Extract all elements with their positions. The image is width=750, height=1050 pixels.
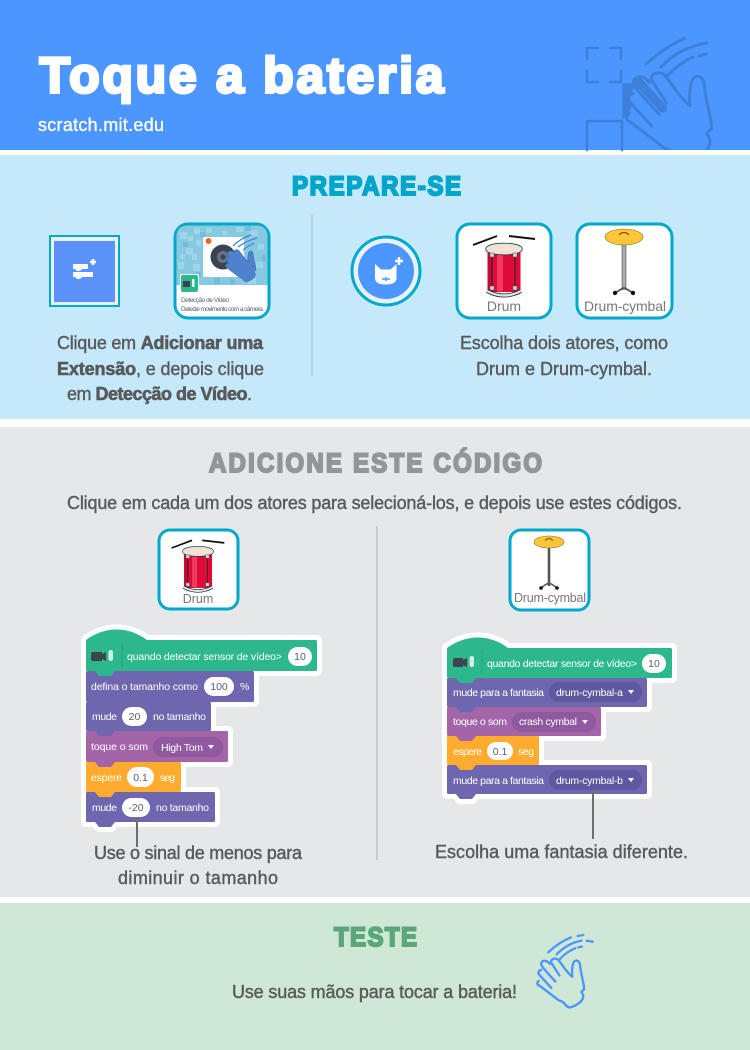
- block: wait: [86, 762, 181, 797]
- block: switch costume b: mude para a fantasia: [453, 775, 544, 787]
- text: add extension instructions: Extensão, e depois clique: [57, 359, 264, 379]
- title: Toque a bateria: [40, 48, 445, 104]
- text: choose sprites instructions: Escolha dois atores, como: [460, 333, 668, 353]
- block: change size -20: [86, 792, 215, 827]
- card: cymbal sprite small: [510, 530, 589, 610]
- heading: prepare: PREPARE-SE: [292, 172, 461, 201]
- block: play sound: High Tom: [161, 742, 203, 754]
- card: drum sprite small: [159, 530, 238, 609]
- block: when video motion: [447, 638, 672, 683]
- block: switch costume b: [447, 765, 647, 799]
- block: wait: espere: [453, 746, 482, 758]
- text: add extension instructions: em Detecção de Vídeo.: [67, 384, 252, 404]
- icon: waving hand: [537, 935, 593, 1007]
- card: cymbal sprite: Drum-cymbal: [584, 298, 666, 314]
- text: test instructions: Use suas mãos para tocar a bateria!: [232, 982, 517, 1002]
- icon: video sensing hand: [587, 38, 712, 162]
- block: wait: espere: [91, 772, 122, 784]
- block: play sound crash cymbal: crash cymbal: [519, 716, 577, 728]
- code stack: cymbal: [447, 638, 672, 799]
- block: change size 20: 20: [129, 711, 140, 723]
- block: change size -20: -20: [128, 802, 144, 814]
- block: set size 100: 100: [210, 681, 228, 693]
- block: change size -20: no tamanho: [156, 802, 209, 814]
- panel: add code: [0, 427, 750, 897]
- block: when video motion: 10: [648, 658, 660, 670]
- icon: add extension button: [50, 236, 119, 306]
- block: change size 20: mude: [92, 711, 117, 723]
- block: wait: 0.1: [493, 746, 507, 758]
- text: code instructions: Clique em cada um dos atores para selecioná-los, e depois use estes códigos.: [67, 493, 682, 513]
- text: costume note: Escolha uma fantasia diferente.: [435, 842, 688, 862]
- block: wait: [447, 736, 539, 770]
- block: when video motion: quando detectar sensor de vídeo>: [487, 658, 637, 670]
- block: when video motion: quando detectar sensor de vídeo>: [127, 651, 282, 663]
- card: cymbal sprite small: Drum-cymbal: [514, 591, 586, 605]
- heading: add code: ADICIONE ESTE CÓDIGO: [209, 447, 542, 478]
- callout line: minus sign: [136, 817, 138, 847]
- block: set size 100: defina o tamanho como: [91, 681, 198, 693]
- block: set size 100: %: [240, 681, 249, 693]
- text: choose sprites instructions: [460, 333, 668, 379]
- text: choose sprites instructions: Drum e Drum-cymbal.: [476, 359, 652, 379]
- card: video sensing extension: Detecte movimento com a câmera.: [181, 306, 264, 313]
- block: wait: 0.1: [133, 772, 148, 784]
- heading: test: TESTE: [334, 923, 417, 952]
- callout line: costume: [592, 790, 594, 839]
- block: change size -20: mude: [92, 802, 117, 814]
- block: play sound crash cymbal: [447, 707, 601, 741]
- card: cymbal sprite: [577, 224, 672, 318]
- block: play sound crash cymbal: toque o som: [453, 716, 507, 728]
- block: change size 20: [86, 702, 211, 736]
- card: drum sprite: [457, 224, 551, 318]
- panel: prepare: [0, 155, 750, 419]
- card: drum sprite small: Drum: [183, 592, 213, 606]
- block: when video motion: [86, 630, 317, 676]
- card: video sensing extension: [175, 224, 269, 318]
- block: switch costume a: drum-cymbal-a: [556, 687, 623, 699]
- block: change size 20: no tamanho: [153, 711, 206, 723]
- block: when video motion: 10: [294, 651, 306, 663]
- website url: scratch.mit.edu: [38, 115, 164, 135]
- block: switch costume b: drum-cymbal-b: [556, 775, 623, 787]
- block: switch costume a: mude para a fantasia: [453, 687, 544, 699]
- panel: test: [0, 903, 750, 1050]
- text: add extension instructions: Clique em Adicionar uma: [57, 333, 264, 353]
- block: wait: seg: [518, 746, 534, 758]
- text: add extension instructions: [57, 333, 264, 404]
- text: minus sign note: Use o sinal de menos para: [94, 843, 303, 863]
- text: minus sign note: [94, 843, 303, 888]
- code stack: drum: [86, 630, 317, 827]
- card: video sensing extension: Detecção de Vídeo: [181, 297, 229, 304]
- card: drum sprite: Drum: [487, 298, 521, 314]
- icon: choose sprite button: [352, 237, 420, 305]
- block: play sound: [86, 731, 228, 767]
- block: wait: seg: [160, 772, 175, 784]
- block: switch costume a: [447, 678, 647, 712]
- text: minus sign note: diminuir o tamanho: [118, 868, 278, 888]
- block: play sound: toque o som: [91, 741, 148, 753]
- block: set size 100: [86, 671, 254, 707]
- panel: header: [0, 0, 750, 162]
